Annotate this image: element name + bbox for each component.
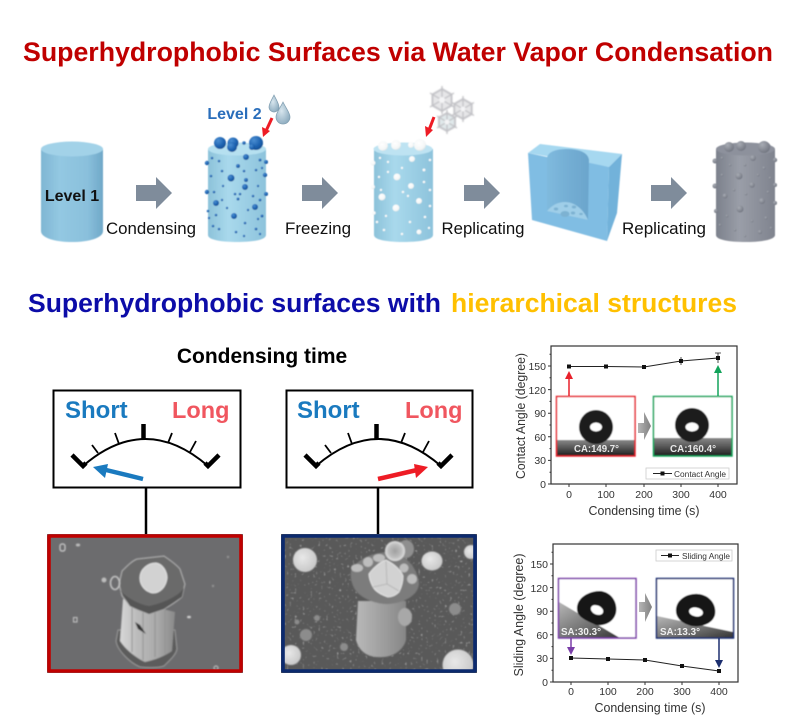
y tick labels: 30	[536, 653, 548, 665]
chart frame and axes	[550, 544, 738, 685]
arrow: between contact angle insets	[638, 412, 651, 440]
gauge: short	[54, 390, 240, 488]
y axis title: Contact Angle (degree)	[514, 353, 528, 479]
legend	[646, 468, 729, 479]
connector: short gauge to image	[145, 488, 147, 535]
arrow: purple down	[567, 638, 575, 655]
y tick labels	[530, 559, 548, 689]
subtitle: hierarchical structures	[451, 290, 737, 318]
inset: SA 13.3	[656, 578, 734, 638]
y tick labels: 120	[530, 583, 548, 595]
label: second replicating: Replicating	[622, 219, 706, 238]
icon: snowflakes	[430, 86, 474, 134]
x tick labels: 0	[566, 489, 572, 501]
x tick labels: 300	[673, 686, 691, 698]
gauge: long	[286, 390, 472, 488]
chart frame and axes	[548, 346, 737, 487]
cylinder: gray replica	[712, 141, 777, 242]
mold cutaway	[528, 144, 622, 241]
arrow: freezing	[302, 177, 338, 209]
data line	[569, 656, 721, 673]
arrow: second replicating	[651, 177, 687, 209]
heading: condensing time: Condensing time	[177, 345, 347, 368]
label: SA 30.3: SA:30.3°	[561, 627, 601, 638]
x tick labels: 200	[636, 686, 654, 698]
y tick labels: 150	[530, 559, 548, 571]
x tick labels: 300	[672, 489, 690, 501]
inset: CA 160.4	[654, 396, 732, 456]
arrow: navy down	[715, 638, 723, 668]
arrow: red up	[565, 371, 573, 396]
label: CA 160.4: CA:160.4°	[670, 443, 716, 455]
y tick labels	[528, 361, 546, 491]
arrow: between sliding angle insets	[639, 593, 652, 622]
legend	[656, 550, 732, 561]
gauge: long: Short	[297, 397, 360, 424]
inset: SA 30.3	[558, 578, 636, 638]
data line	[567, 353, 721, 369]
x tick labels: 200	[635, 489, 653, 501]
label: level 2: Level 2	[207, 106, 262, 123]
label: first replicating: Replicating	[442, 219, 524, 238]
cylinder: frozen droplets	[370, 139, 433, 242]
connector: long gauge to image	[377, 488, 379, 535]
chart: contact angle	[514, 346, 737, 518]
SEM image: short condensing	[47, 534, 243, 673]
arrow: red to frozen droplets	[425, 117, 434, 137]
y axis title: Sliding Angle (degree)	[512, 554, 526, 676]
y tick labels: 60	[534, 432, 546, 444]
inset: CA 149.7	[556, 396, 635, 456]
label: SA 13.3: SA:13.3°	[660, 627, 700, 638]
legend: Contact Angle	[674, 470, 726, 479]
x tick labels: 400	[709, 489, 727, 501]
x tick labels	[568, 686, 728, 698]
cylinder: water droplets	[205, 136, 268, 242]
cylinder: level 1	[41, 142, 103, 242]
y tick labels: 90	[536, 606, 548, 618]
SEM image: long condensing	[281, 534, 478, 680]
y tick labels: 0	[540, 479, 546, 491]
arrow: condensing	[136, 177, 172, 209]
label: level 1: Level 1	[45, 188, 99, 205]
y tick labels: 120	[528, 385, 546, 397]
x tick labels: 100	[599, 686, 617, 698]
arrow: first replicating	[464, 177, 500, 209]
gauge: short: Short	[65, 397, 128, 424]
x axis title: Condensing time (s)	[588, 504, 700, 518]
label: CA 149.7: CA:149.7°	[574, 443, 619, 455]
icon: water drops	[269, 95, 290, 124]
title: Superhydrophobic Surfaces via Water Vapor Condensation	[23, 37, 773, 67]
y tick labels: 30	[534, 455, 546, 467]
gauge: short: Long	[172, 397, 229, 423]
y tick labels: 0	[542, 677, 548, 689]
x tick labels: 100	[597, 489, 615, 501]
chart: sliding angle	[512, 544, 738, 715]
gauge: long: Long	[405, 397, 462, 423]
arrow: green up	[714, 365, 722, 396]
legend: Sliding Angle	[682, 552, 730, 561]
y tick labels: 150	[528, 361, 546, 373]
label: condensing: Condensing	[106, 219, 196, 238]
subtitle: Superhydrophobic surfaces with	[28, 290, 441, 318]
x tick labels: 0	[568, 686, 574, 698]
label: freezing: Freezing	[285, 219, 351, 238]
x tick labels	[566, 489, 727, 501]
x tick labels: 400	[710, 686, 728, 698]
arrow: red to droplets	[262, 118, 272, 137]
y tick labels: 90	[534, 408, 546, 420]
x axis title: Condensing time (s)	[594, 701, 706, 715]
process flow	[41, 86, 777, 242]
y tick labels: 60	[536, 630, 548, 642]
